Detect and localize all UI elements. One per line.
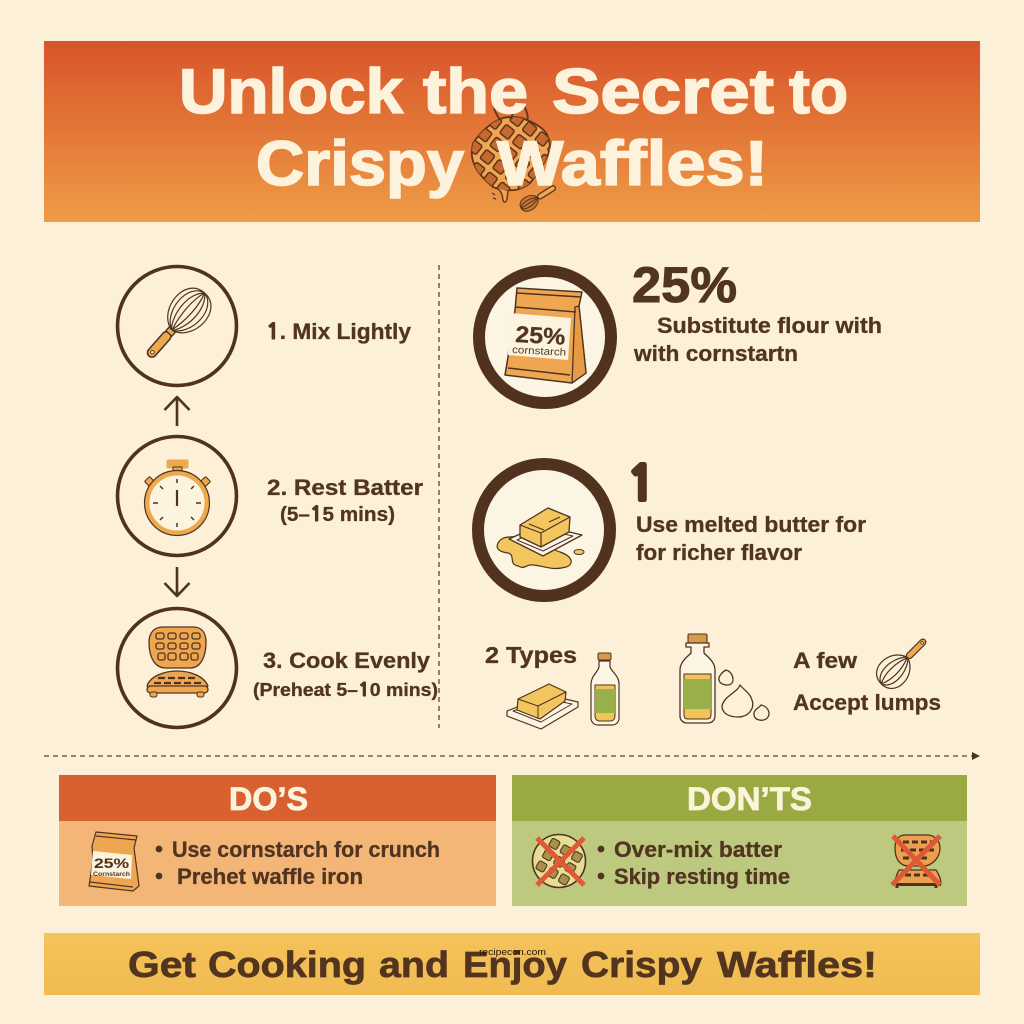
footer text: and [379,944,449,985]
a few label: A few [793,648,858,673]
icon: crossed out waffle iron [892,835,941,888]
do's bullets [156,837,440,889]
step 2 label: 2. Rest Batter [267,475,423,500]
accept lumps label: Accept lumps [793,690,941,715]
stat: 25%: with cornstartn [633,341,798,366]
step 3 label: (Preheat 5– 10 mins) [253,680,438,700]
footer text: Waffles! [717,944,877,985]
icon: crossed out waffle [532,834,586,888]
title: to [789,57,848,127]
icon: small cornstarch bag: Cornstarch [93,871,130,878]
bag label: 25% [515,321,566,350]
panel: do's [59,775,496,906]
footer text: Enjoy [463,944,567,985]
stat: 1: for richer flavor [636,540,802,565]
step 1: whisk icon [118,266,236,386]
step 2: stopwatch icon [118,436,236,556]
icon: butter on dish [507,684,578,729]
stat: 1 [627,461,866,565]
bag label: cornstarch [512,344,567,359]
don'ts bullets [598,837,790,889]
icon: melting butter [478,464,610,596]
stat: 1: Use melted butter for [636,512,866,537]
icon: whisk [870,629,936,695]
do's bullets: Use cornstarch for crunch [172,837,440,862]
arrow: horizontal dashed divider [44,752,980,760]
panel: don'ts [512,775,967,906]
step 2 label: (5–15 mins) [280,504,395,526]
title: Secret [552,57,774,127]
don'ts heading: DON’TS [687,781,812,817]
footer text [128,944,877,985]
footer text: Get [128,944,196,985]
step 3 label: 3. Cook Evenly [263,648,431,673]
title: the [423,57,528,127]
step 3 label [253,648,438,700]
arrow up [164,397,190,426]
bag label [512,321,567,359]
arrow down [164,567,190,596]
step 2 label [267,475,423,526]
footer text: Cooking [208,944,366,985]
title: Unlock [179,57,404,127]
footer banner [44,933,980,995]
icon: small cornstarch bag: 25% [94,855,130,871]
stat: 1: 1 [627,461,655,508]
icon: small oil bottle [591,653,619,725]
title: Waffles! [497,129,768,199]
title [179,57,848,199]
icon: waffle and whisk [470,106,556,212]
step 1 label: 1. Mix Lightly [266,319,412,344]
panel: key numbers [478,257,941,729]
do's bullets: Prehet waffle iron [177,864,363,889]
icon: large oil bottle [680,634,715,723]
don'ts bullets: Over-mix batter [614,837,782,862]
panel: three steps [118,266,438,728]
icon: small cornstarch bag [89,832,139,891]
icon: lumps [719,670,769,720]
stat: 25% [632,257,882,366]
step 3: waffle iron icon [118,608,236,728]
title: Crispy [256,129,464,199]
don'ts bullets: Skip resting time [614,864,790,889]
footer text: Crispy [581,944,702,985]
2 types label: 2 Types [485,642,577,668]
icon: cornstarch bag [479,271,611,403]
watermark: recipecon.com [479,947,546,958]
stat: 25%: Substitute flour with [657,313,882,338]
do's heading: DO’S [229,781,308,817]
stat: 25%: 25% [632,257,737,313]
header banner [44,41,980,222]
